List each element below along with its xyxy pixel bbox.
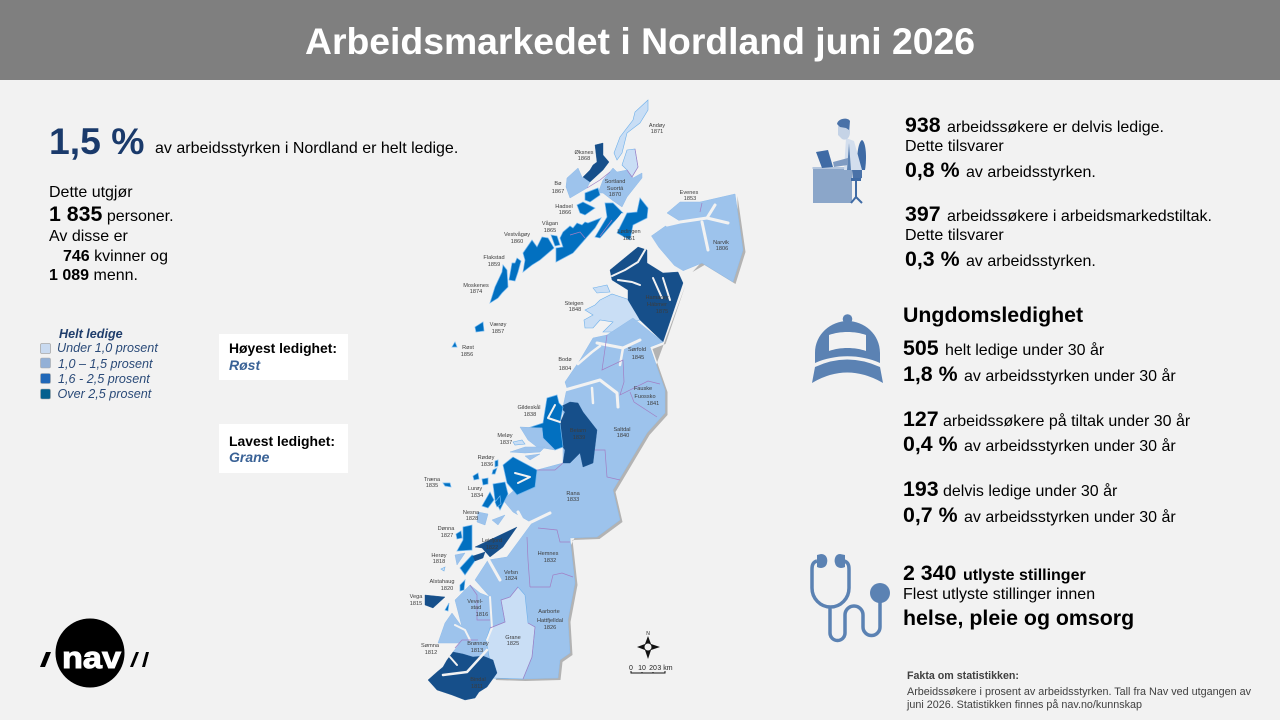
text block: labour market schemes: 397	[905, 202, 941, 226]
place labels: Vevel-	[467, 599, 483, 605]
place labels: 1820	[441, 586, 453, 592]
text block: youth on schemes	[903, 407, 1191, 456]
headline unemployment: av arbeidsstyrken i Nordland er helt ledige.	[155, 140, 458, 157]
text block: statistics note: Fakta om statistikken:	[907, 670, 1019, 682]
place labels: Suortá	[607, 186, 624, 192]
text block: partly unemployed: av arbeidsstyrken.	[966, 164, 1096, 181]
place labels: 1837	[500, 440, 512, 446]
headline unemployment: 1,5 %	[49, 120, 144, 162]
text block: persons: 1 089 menn.	[49, 267, 138, 284]
place labels: Alstahaug	[430, 579, 454, 585]
legend	[40, 327, 158, 401]
logo: nav	[40, 618, 149, 688]
place labels: 1818	[433, 559, 445, 565]
text block: vacancies	[903, 561, 1134, 630]
text block: vacancies: helse, pleie og omsorg	[903, 606, 1134, 630]
callout: highest unemployment: Røst	[229, 357, 261, 373]
text block: youth on schemes: 0,4 %	[903, 432, 958, 456]
place labels: 1838	[524, 412, 536, 418]
text block: youth on schemes: av arbeidsstyrken under 30 år	[964, 437, 1176, 455]
place labels: 1870	[609, 192, 621, 198]
place labels: stad	[471, 605, 481, 611]
place labels: Moskenes	[463, 283, 489, 289]
headline unemployment	[49, 120, 458, 162]
place labels: 1875	[656, 309, 668, 315]
place labels: Vega	[410, 594, 423, 600]
place labels: 1834	[471, 493, 483, 499]
place labels: Sømna	[421, 643, 440, 649]
place labels: 1859	[488, 262, 500, 268]
text block: vacancies: utlyste stillinger	[963, 567, 1086, 584]
text block: youth fully unemployed	[903, 336, 1176, 386]
place labels: Hábmer	[647, 302, 667, 308]
place labels: Evenes	[680, 190, 699, 196]
icon: cap	[812, 314, 883, 383]
place labels: 1826	[544, 625, 556, 631]
text block: persons: Av disse er	[49, 228, 129, 245]
place labels: 1853	[684, 196, 696, 202]
text block: persons: Dette utgjør	[49, 184, 133, 201]
place labels: 1811	[471, 684, 483, 690]
place labels: 1841	[647, 401, 659, 407]
place labels: 1851	[623, 236, 635, 242]
place labels: 1868	[578, 156, 590, 162]
place labels: 1825	[507, 641, 519, 647]
legend: 1,0 – 1,5 prosent	[58, 357, 153, 371]
place labels: Steigen	[565, 301, 583, 307]
place labels: Vefsn	[504, 570, 518, 576]
place labels: Bindal	[470, 677, 486, 683]
place labels: Hattfjelldal	[537, 618, 563, 624]
text block: partly unemployed: Dette tilsvarer	[905, 138, 1004, 155]
icon: stethoscope	[812, 554, 890, 640]
text block: youth partly unemployed: 193	[903, 477, 939, 501]
text block: labour market schemes: 0,3 %	[905, 247, 960, 271]
place labels: Fuossko	[634, 394, 656, 400]
place labels: Narvik	[713, 240, 729, 246]
place labels: 1874	[470, 289, 482, 295]
place labels: Beiarn	[570, 428, 586, 434]
place labels: 1824	[505, 576, 517, 582]
place labels: Meløy	[497, 433, 513, 439]
callout: highest unemployment	[219, 334, 348, 380]
place labels: 1822	[486, 545, 498, 551]
place labels: 1848	[569, 307, 581, 313]
place labels: 1840	[617, 433, 629, 439]
place labels: Andøy	[649, 123, 665, 129]
place labels: 1828	[466, 516, 478, 522]
place labels: 1857	[492, 329, 504, 335]
text block: partly unemployed: 0,8 %	[905, 158, 960, 182]
place labels: Lurøy	[468, 486, 482, 492]
municipalities: Salten to Helgeland	[425, 318, 665, 700]
legend: 1,6 - 2,5 prosent	[58, 372, 150, 386]
text block: vacancies: 2 340	[903, 561, 956, 585]
place labels	[410, 123, 729, 690]
place labels: Saltdal	[613, 427, 631, 433]
compass and scale bar: 20	[649, 665, 657, 672]
place labels: 1833	[567, 497, 579, 503]
place labels: Hadsel	[555, 204, 573, 210]
text block: youth fully unemployed: av arbeidsstyrken under 30 år	[964, 367, 1176, 385]
text block: youth fully unemployed: helt ledige under 30 år	[945, 341, 1105, 359]
map shadow	[496, 196, 746, 681]
place labels: 1812	[425, 650, 437, 656]
place labels: 1871	[651, 129, 663, 135]
callout: highest unemployment: Høyest ledighet:	[229, 340, 337, 356]
place labels: 1865	[544, 228, 556, 234]
place labels: Vågan	[542, 220, 558, 227]
text block: labour market schemes	[905, 202, 1212, 271]
compass and scale bar: 0	[629, 665, 633, 672]
place labels: Sortland	[605, 179, 625, 185]
text block: youth partly unemployed	[903, 477, 1176, 527]
text block: labour market schemes: av arbeidsstyrken.	[966, 253, 1096, 270]
municipalities: Vesterålen and Lofoten	[452, 100, 648, 347]
place labels: 1813	[471, 648, 483, 654]
place labels: Dønna	[438, 526, 455, 532]
place labels: Herøy	[431, 553, 447, 559]
compass and scale bar: N	[646, 631, 650, 637]
text block: youth partly unemployed: delvis ledige under 30 år	[943, 482, 1118, 500]
text block: statistics note	[906, 670, 1252, 711]
place labels: Aarborte	[538, 609, 560, 615]
place labels: Vestvågøy	[504, 231, 530, 238]
legend: Helt ledige	[59, 327, 123, 341]
place labels: Flakstad	[483, 255, 505, 261]
place labels: 1816	[476, 612, 488, 618]
text block: youth fully unemployed: 505	[903, 336, 939, 360]
text block: partly unemployed	[905, 113, 1164, 182]
place labels: Øksnes	[575, 150, 594, 156]
text block: vacancies: Flest utlyste stillinger innen	[903, 586, 1095, 603]
text block: persons: 1 835 personer.	[49, 202, 174, 226]
place labels: 1856	[461, 352, 473, 358]
place labels: Hemnes	[538, 551, 559, 557]
logo: nav: nav	[62, 640, 122, 675]
place labels: Fauske	[634, 386, 652, 392]
place labels: 1836	[481, 462, 493, 468]
place labels: 1832	[544, 558, 556, 564]
callout: lowest unemployment: Grane	[229, 449, 270, 465]
heading: youth unemployment: Ungdomsledighet	[903, 303, 1083, 327]
place labels: Gildeskål	[517, 404, 541, 411]
place labels: 1845	[632, 355, 644, 361]
place labels: 1860	[511, 239, 523, 245]
place labels: Nesna	[463, 510, 480, 516]
text block: statistics note: juni 2026. Statistikken finnes på nav.no/kunnskap	[906, 699, 1142, 711]
place labels: 1806	[716, 246, 728, 252]
text block: persons	[49, 184, 174, 284]
place labels: Hamarøy	[646, 295, 669, 301]
text block: youth partly unemployed: av arbeidsstyrken under 30 år	[964, 508, 1176, 526]
text block: labour market schemes: Dette tilsvarer	[905, 227, 1004, 244]
text block: youth partly unemployed: 0,7 %	[903, 503, 958, 527]
place labels: 1815	[410, 601, 422, 607]
callout: lowest unemployment	[219, 424, 348, 473]
text block: youth on schemes: arbeidssøkere på tiltak under 30 år	[943, 412, 1191, 430]
place labels: 1804	[559, 366, 571, 372]
municipalities: Narvik and Hamarøy	[584, 194, 743, 342]
compass and scale bar: 3 km	[657, 665, 673, 672]
title banner	[0, 0, 1280, 80]
legend: Over 2,5 prosent	[58, 387, 152, 401]
title banner: Arbeidsmarkedet i Nordland juni 2026	[305, 20, 975, 62]
place labels: 1827	[441, 533, 453, 539]
text block: partly unemployed: arbeidssøkere er delvis ledige.	[947, 119, 1164, 136]
map of Nordland	[410, 100, 746, 700]
compass and scale bar: 10	[638, 665, 646, 672]
place labels: Træna	[424, 477, 441, 483]
place labels: Grane	[505, 635, 521, 641]
callout: lowest unemployment: Lavest ledighet:	[229, 433, 335, 449]
place labels: 1839	[573, 435, 585, 441]
compass and scale bar	[629, 631, 673, 673]
place labels: Bø	[554, 181, 562, 187]
icon: person at desk	[812, 119, 866, 203]
place labels: 1835	[426, 483, 438, 489]
place labels: Brønnøy	[467, 641, 489, 647]
place labels: 1866	[559, 210, 571, 216]
place labels: Lødingen	[617, 229, 641, 235]
text block: persons: 746 kvinner og	[63, 248, 168, 265]
text block: youth fully unemployed: 1,8 %	[903, 362, 958, 386]
place labels: Sørfold	[628, 347, 646, 353]
legend: Under 1,0 prosent	[57, 341, 158, 355]
place labels: Leirfjord	[482, 538, 502, 544]
place labels: Rana	[566, 491, 581, 497]
place labels: Rødøy	[478, 455, 495, 461]
text block: labour market schemes: arbeidssøkere i arbeidsmarkedstiltak.	[947, 208, 1212, 225]
place labels: 1867	[552, 189, 564, 195]
text block: statistics note: Arbeidssøkere i prosent av arbeidsstyrken. Tall fra Nav ved utgangen av	[907, 686, 1252, 698]
place labels: Værøy	[490, 322, 507, 328]
text block: youth on schemes: 127	[903, 407, 939, 431]
text block: partly unemployed: 938	[905, 113, 941, 137]
place labels: Bodø	[558, 357, 572, 363]
place labels: Røst	[462, 345, 474, 351]
